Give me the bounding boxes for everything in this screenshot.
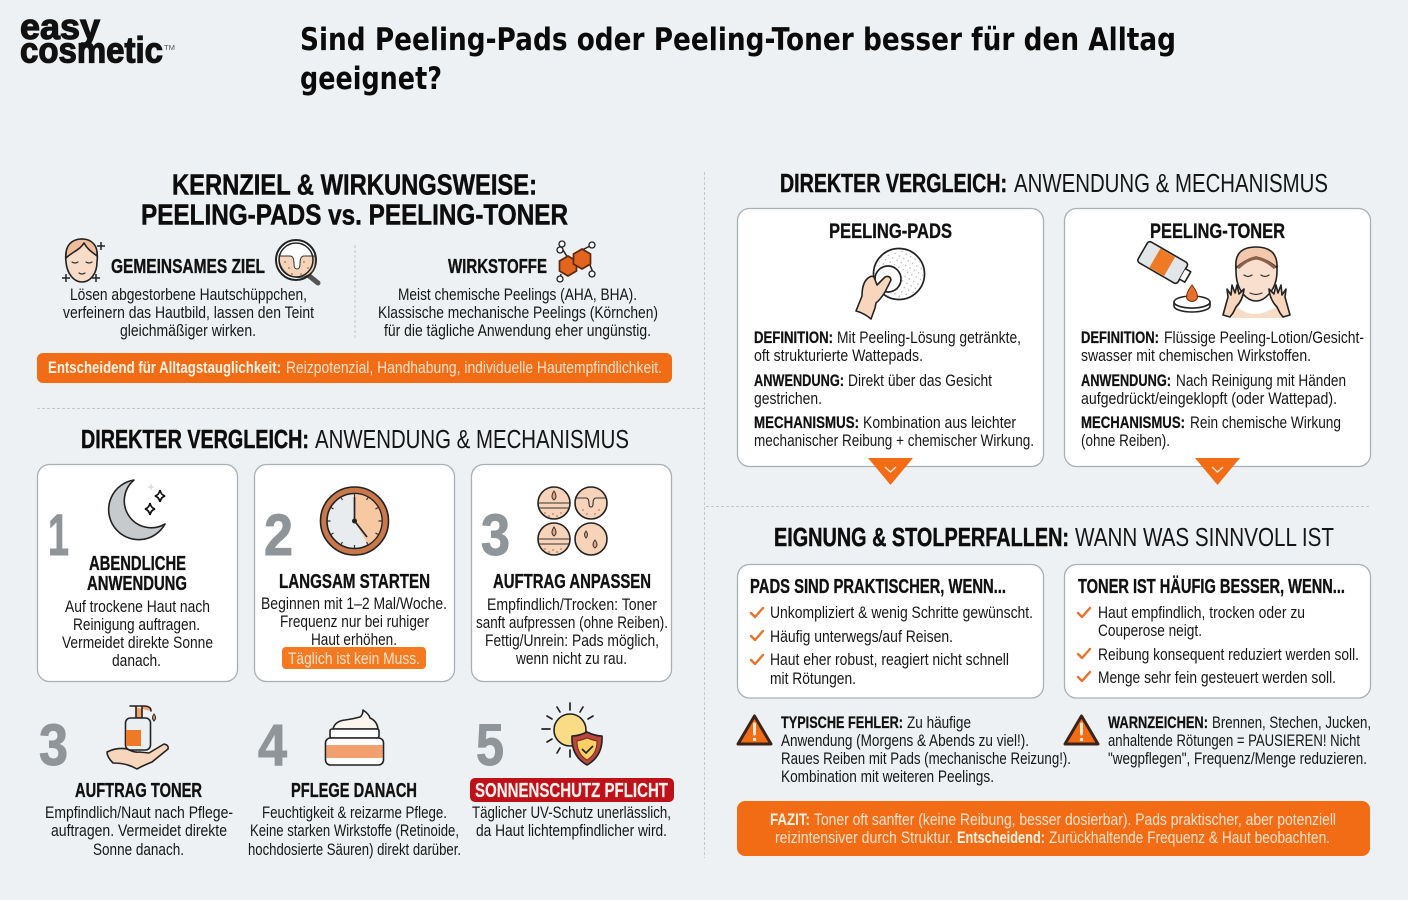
text: Frequenz nur bei ruhiger	[280, 612, 429, 631]
text: Gemeinsames Ziel	[63, 256, 314, 340]
text: Beginnen mit 1–2 Mal/Woche.	[261, 594, 447, 613]
text: Anwendung (Morgens & Abends zu viel!).	[781, 731, 1029, 750]
list: mit Rötungen.	[770, 669, 856, 688]
text: aufgedrückt/eingeklopft (oder Wattepad).	[1081, 389, 1337, 408]
panel: step 1 Abendliche Anwendung	[38, 464, 238, 682]
text: ABENDLICHE	[89, 553, 186, 575]
text: Gemeinsames Ziel: GEMEINSAMES ZIEL	[111, 256, 265, 278]
heading: Direkter Vergleich links: DIREKTER VERGLEICH:	[81, 424, 309, 454]
panel: step 3 Auftrag anpassen	[472, 464, 672, 682]
text: DEFINITION:	[1081, 328, 1159, 347]
text: gestrichen.	[754, 389, 822, 408]
text: DEFINITION:	[754, 328, 833, 347]
check icons	[751, 608, 763, 664]
list: Unkompliziert & wenig Schritte gewünscht.	[770, 603, 1033, 622]
heading: Eignung und Stolperfallen: WANN WAS SINNVOLL IST	[1075, 522, 1334, 552]
text: Kombination mit weiteren Peelings.	[781, 767, 994, 786]
title: geeignet?	[300, 61, 442, 97]
text: PFLEGE DANACH	[291, 780, 417, 802]
text: Empfindlich/Trocken: Toner	[487, 595, 657, 614]
text: Flüssige Peeling-Lotion/Gesicht-	[1164, 328, 1364, 347]
panel: step 2 Langsam starten	[254, 464, 454, 682]
number 4: 4	[258, 713, 287, 778]
step 5: Sonnenschutz	[470, 703, 674, 840]
text: hochdosierte Säuren) direkt darüber.	[248, 840, 461, 859]
text: danach.	[112, 651, 161, 670]
icon: sun with shield	[542, 703, 602, 765]
text: Vermeidet direkte Sonne	[62, 633, 213, 652]
text	[45, 780, 233, 859]
panel: Pads praktischer	[738, 564, 1044, 698]
text: Rein chemische Wirkung	[1190, 413, 1341, 432]
text: Gemeinsames Ziel: gleichmäßiger wirken.	[120, 321, 256, 340]
icon: toner bottle and pad	[1137, 241, 1210, 312]
logo: easycosmetic: TM	[164, 45, 175, 52]
badge: Sonnenschutz Pflicht: SONNENSCHUTZ PFLICHT	[475, 780, 668, 802]
panel: Peeling-Toner	[1064, 208, 1370, 485]
text: auftragen. Vermeidet direkte	[51, 821, 227, 840]
text: AUFTRAG ANPASSEN	[493, 571, 651, 593]
text: Reinigung auftragen.	[73, 615, 200, 634]
panel: Toner besser	[1064, 564, 1370, 698]
list: Häufig unterwegs/auf Reisen.	[770, 627, 953, 646]
text: MECHANISMUS:	[1081, 413, 1185, 432]
text: Wirkstoffe: WIRKSTOFFE	[448, 256, 547, 278]
icon: clock	[320, 487, 388, 555]
step 4: Pflege danach	[248, 710, 461, 859]
text: Wirkstoffe: für die tägliche Anwendung eher ungünstig.	[384, 321, 651, 340]
callout: Fazit: reizintensiver durch Struktur.	[775, 828, 953, 847]
arrow down	[868, 458, 913, 485]
text: TYPISCHE FEHLER:	[781, 713, 903, 732]
heading: Direkter Vergleich rechts	[780, 168, 1328, 198]
icon: face	[62, 239, 105, 282]
text: (ohne Reiben).	[1081, 431, 1170, 450]
list	[1098, 603, 1359, 687]
number 1: 1	[48, 503, 69, 568]
number 3: 3	[481, 503, 510, 568]
text: WARNZEICHEN:	[1108, 713, 1208, 732]
text: Direkt über das Gesicht	[848, 371, 992, 390]
text: Gemeinsames Ziel: Lösen abgestorbene Hautschüppchen,	[70, 285, 307, 304]
callout: Entscheidend: Entscheidend für Alltagstauglichkeit:	[48, 358, 281, 377]
text: Auf trockene Haut nach	[65, 597, 210, 616]
icon: warning triangle	[1065, 716, 1098, 744]
title: Sind Peeling-Pads oder Peeling-Toner besser für den Alltag	[300, 22, 1176, 58]
text: mechanischer Reibung + chemischer Wirkung.	[754, 431, 1034, 450]
text: Zu häufige	[907, 713, 971, 732]
text	[754, 328, 1034, 450]
number 2: 2	[264, 503, 293, 568]
text	[781, 713, 1071, 786]
list: Menge sehr fein gesteuert werden soll.	[1098, 668, 1336, 687]
text	[62, 553, 213, 670]
warning: Warnzeichen	[1065, 713, 1371, 768]
text: Kombination aus leichter	[863, 413, 1016, 432]
heading: Direkter Vergleich links	[81, 424, 629, 454]
icon: moon	[109, 480, 165, 540]
text: Sonne danach.	[93, 840, 184, 859]
text: Täglicher UV-Schutz unerlässlich,	[472, 803, 671, 822]
list	[770, 603, 1033, 688]
text: Wirkstoffe: Meist chemische Peelings (AHA, BHA).	[398, 285, 637, 304]
list: Couperose neigt.	[1098, 621, 1202, 640]
heading: Kernziel: PEELING-PADS vs. PEELING-TONER	[141, 200, 568, 232]
title	[300, 22, 1176, 97]
logo: easycosmetic	[20, 6, 175, 70]
icon: molecule	[557, 241, 595, 282]
text: Mit Peeling-Lösung getränkte,	[837, 328, 1021, 347]
text	[248, 780, 461, 859]
text	[1108, 713, 1371, 768]
text: Empfindlich/Naut nach Pflege-	[45, 803, 233, 822]
text: da Haut lichtempfindlicher wird.	[476, 821, 667, 840]
list: Haut empfindlich, trocken oder zu	[1098, 603, 1305, 622]
heading: Eignung und Stolperfallen	[774, 522, 1334, 552]
text: Gemeinsames Ziel: verfeinern das Hautbild, lassen den Teint	[63, 303, 314, 322]
callout: Fazit: Zurückhaltende Frequenz & Haut beobachten.	[1049, 828, 1330, 847]
panel: Peeling-Pads	[738, 208, 1044, 485]
heading: Direkter Vergleich rechts: ANWENDUNG & MECHANISMUS	[1014, 168, 1328, 198]
callout: Entscheidend	[37, 353, 672, 383]
heading: Kernziel	[141, 170, 568, 232]
text: ANWENDUNG	[87, 573, 187, 595]
heading: PADS SIND PRAKTISCHER, WENN...	[750, 576, 1006, 598]
text: ANWENDUNG:	[754, 371, 844, 390]
heading: Kernziel: KERNZIEL & WIRKUNGSWEISE:	[172, 170, 537, 202]
text: wenn nicht zu rau.	[515, 649, 627, 668]
text	[472, 803, 671, 840]
callout: Entscheidend: Reizpotenzial, Handhabung, individuelle Hautempfindlichkeit.	[286, 358, 662, 377]
heading: Direkter Vergleich links: ANWENDUNG & MECHANISMUS	[315, 424, 629, 454]
text: Wirkstoffe: Klassische mechanische Peelings (Körnchen)	[378, 303, 658, 322]
callout: Fazit: FAZIT:	[770, 810, 810, 829]
panel: Kernziel und Wirkungsweise	[37, 170, 672, 383]
icon: skin types	[538, 487, 607, 555]
list: Haut eher robust, reagiert nicht schnell	[770, 650, 1009, 669]
arrow down	[1195, 458, 1240, 485]
step 3: Auftrag Toner	[39, 706, 233, 859]
logo: easycosmetic: cosmetic	[20, 30, 163, 70]
callout: Fazit	[737, 801, 1370, 856]
heading: Eignung und Stolperfallen: EIGNUNG & STOLPERFALLEN:	[774, 522, 1069, 552]
icon: face with hands	[1223, 247, 1290, 318]
logo: easycosmetic: easy	[20, 6, 100, 47]
number 5: 5	[476, 713, 504, 778]
heading: Direkter Vergleich rechts: DIREKTER VERGLEICH:	[780, 168, 1007, 198]
number 3: 3	[39, 713, 68, 778]
text: Wirkstoffe	[378, 256, 658, 340]
text: Haut erhöhen.	[311, 630, 397, 649]
warning: typische Fehler	[738, 713, 1071, 786]
check icons	[1078, 608, 1090, 681]
icon: pump bottle in hand	[107, 706, 168, 769]
text: swasser mit chemischen Wirkstoffen.	[1081, 346, 1311, 365]
text: Fettig/Unrein: Pads möglich,	[485, 631, 659, 650]
icon: magnifier	[276, 240, 318, 283]
badge: Täglich ist kein Muss: Täglich ist kein Muss.	[288, 649, 420, 668]
text	[1081, 328, 1364, 450]
text	[476, 571, 668, 668]
text	[261, 571, 447, 649]
text: Raues Reiben mit Pads (mechanische Reizung!).	[781, 749, 1071, 768]
text: oft strukturierte Wattepads.	[754, 346, 923, 365]
text: LANGSAM STARTEN	[279, 571, 430, 593]
callout: Fazit: Entscheidend:	[957, 828, 1045, 847]
heading: PEELING-TONER	[1150, 220, 1285, 243]
text: sanft aufpressen (ohne Reiben).	[476, 613, 668, 632]
icon: hand with pad	[856, 248, 924, 319]
icon: cream jar	[326, 710, 384, 765]
text: MECHANISMUS:	[754, 413, 859, 432]
text: ANWENDUNG:	[1081, 371, 1171, 390]
text: AUFTRAG TONER	[75, 780, 202, 802]
text: Keine starken Wirkstoffe (Retinoide,	[250, 821, 459, 840]
icon: warning triangle	[738, 716, 771, 744]
text: Feuchtigkeit & reizarme Pflege.	[262, 803, 447, 822]
heading: PEELING-PADS	[829, 220, 952, 243]
text: Nach Reinigung mit Händen	[1176, 371, 1346, 390]
